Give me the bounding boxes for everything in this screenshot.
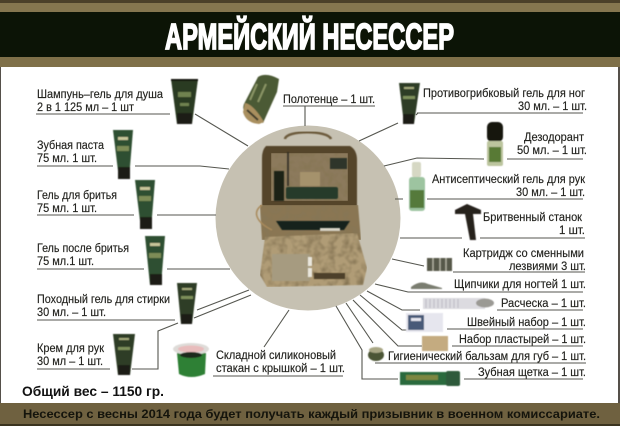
icon: sewing kit (406, 313, 443, 332)
icon: antiseptic spray (409, 162, 425, 211)
icon: deodorant (487, 122, 503, 166)
label: shampoo (37, 89, 164, 114)
label: comb: Расческа – 1 шт. (501, 298, 586, 310)
label: cartridge: лезвиями 3 шт. (509, 261, 586, 273)
icon: blade cartridge (427, 258, 452, 271)
icon: shampoo tube (171, 79, 198, 124)
label: laundry gel: 30 мл. – 1 шт. (37, 307, 106, 319)
label: plasters: Набор пластырей – 1 шт. (459, 334, 586, 346)
label: cartridge: Картридж со сменными (463, 248, 584, 260)
icon: folding cup (173, 343, 209, 377)
icon: hand cream tube (113, 334, 135, 375)
label: after-shave gel: Гель после бритья (37, 243, 129, 255)
label: toothpaste: 75 мл. 1 шт. (37, 153, 97, 165)
right labels (388, 88, 587, 379)
label: shampoo: 2 в 1 125 мл – 1 шт (37, 102, 135, 114)
icon: antifungal gel tube (399, 83, 420, 124)
icon: razor (455, 204, 481, 240)
label: toothpaste (37, 140, 105, 165)
label: after-shave gel (37, 243, 129, 268)
label: shaving gel (37, 190, 117, 215)
footer band: Несессер с весны 2014 года будет получать каждый призывник в военном комиссариате. (23, 407, 600, 421)
label: nail clippers: Щипчики для ногтей 1 шт. (454, 279, 586, 291)
label: shaving gel: 75 мл. 1 шт. (37, 203, 97, 215)
central circle with bag (216, 126, 400, 310)
label: cup: стакан с крышкой – 1 шт. (216, 363, 345, 375)
label: hand cream (37, 343, 105, 368)
label: laundry gel (37, 294, 170, 319)
label: antifungal gel: Противогрибковый гель для ног (423, 88, 585, 100)
label: antiseptic gel: Антисептический гель для рук (432, 174, 586, 186)
icon: toothbrush (400, 371, 460, 386)
label: cup: Складной силиконовый (216, 350, 336, 362)
label: laundry gel: Походный гель для стирки (37, 294, 170, 306)
icon: plasters (422, 336, 448, 351)
label: deodorant (517, 132, 587, 157)
footer band (0, 403, 620, 426)
label: deodorant: 50 мл. – 1 шт. (517, 145, 587, 157)
label: razor: 1 шт. (559, 225, 585, 237)
label: deodorant: Дезодорант (524, 132, 585, 144)
icon: nail clippers (411, 283, 442, 289)
icon: comb (423, 298, 494, 309)
left labels (37, 89, 170, 368)
label: antiseptic gel (432, 174, 586, 199)
icon: laundry gel tube (177, 283, 197, 324)
icon: towel roll (243, 75, 279, 124)
icon: lip balm (368, 347, 384, 361)
label: cartridge (463, 248, 586, 273)
label: antiseptic gel: 30 мл. – 1 шт. (516, 187, 585, 199)
icon: after-shave gel tube (145, 236, 165, 285)
label: toothbrush: Зубная щетка – 1 шт. (478, 367, 586, 379)
total weight: Общий вес – 1150 гр. (22, 384, 164, 399)
icon: shaving gel tube (135, 180, 155, 229)
label: cup (216, 350, 345, 375)
label: shampoo: Шампунь–гель для душа (37, 89, 164, 101)
label: razor (483, 212, 585, 237)
connector lines (36, 106, 586, 379)
label: antifungal gel (423, 88, 587, 113)
label: shaving gel: Гель для бритья (37, 190, 117, 202)
label: lip balm: Гигиенический бальзам для губ – 1 шт. (388, 351, 586, 363)
label: towel: Полотенце – 1 шт. (283, 94, 375, 106)
label: razor: Бритвенный станок (483, 212, 583, 224)
label: sewing kit: Швейный набор – 1 шт. (467, 317, 586, 329)
bag photo (257, 132, 367, 287)
label: toothpaste: Зубная паста (37, 140, 105, 152)
label: hand cream: 30 мл – 1 шт. (37, 356, 103, 368)
label: antifungal gel: 30 мл. – 1 шт. (518, 101, 587, 113)
label: hand cream: Крем для рук (37, 343, 105, 355)
icon: toothpaste tube (113, 130, 133, 179)
title: АРМЕЙСКИЙ НЕСЕССЕР (165, 15, 454, 57)
label: after-shave gel: 75 мл.1 шт. (37, 256, 94, 268)
